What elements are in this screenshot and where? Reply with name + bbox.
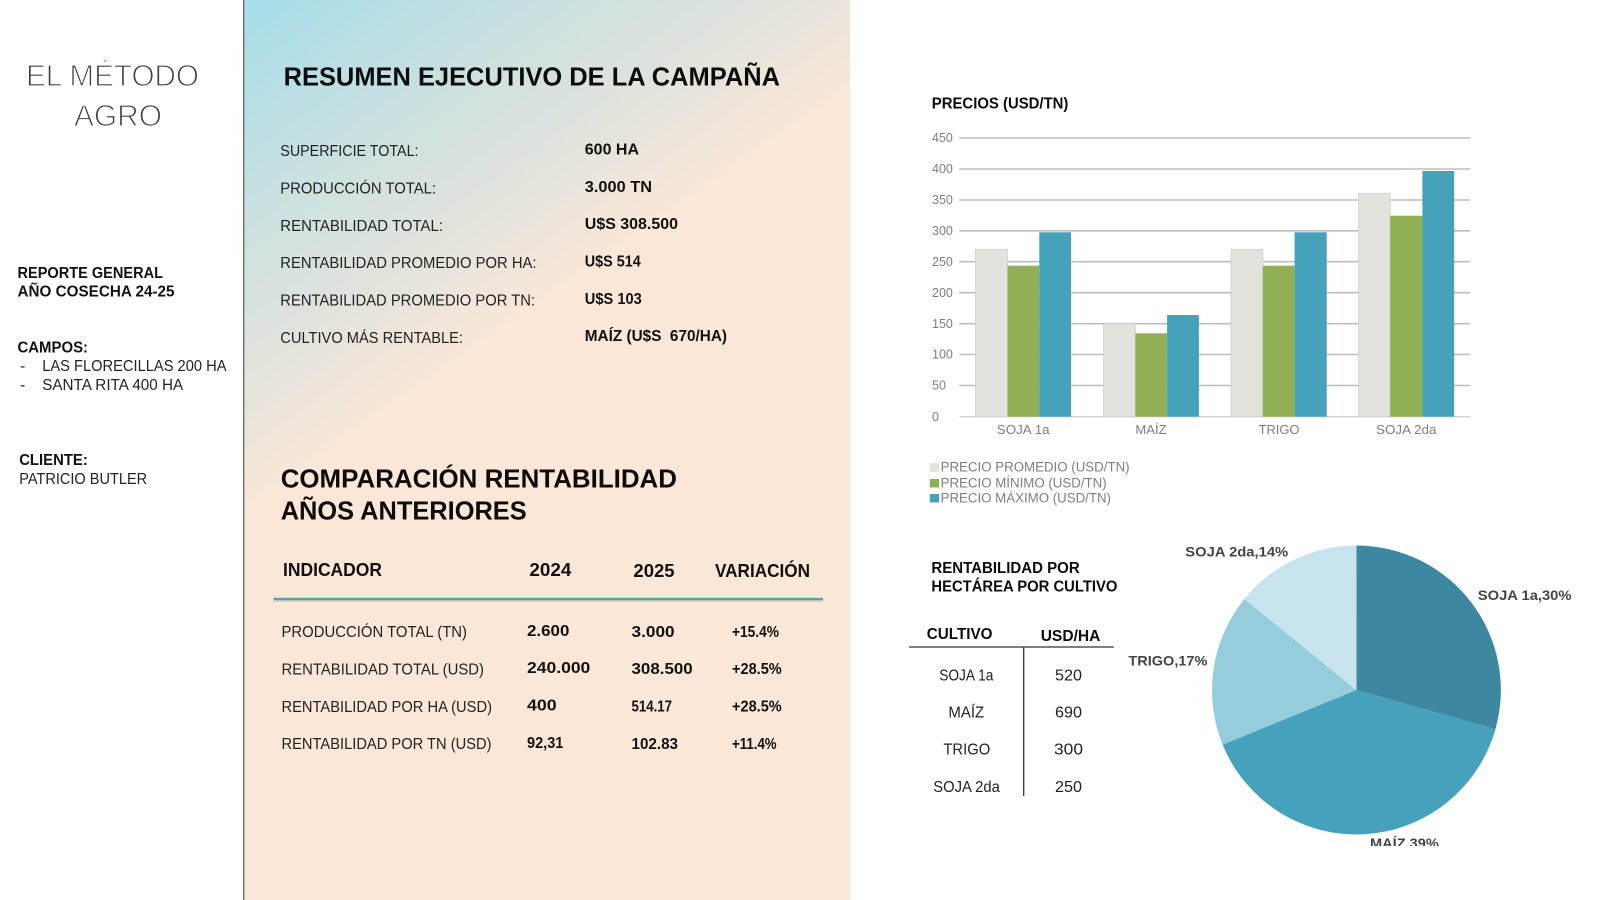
x axis labels: SOJA 2da	[1376, 423, 1437, 437]
table heading: RENTABILIDAD POR	[931, 560, 1080, 577]
panel: sidebar	[18, 58, 227, 488]
panel: comparison	[274, 464, 823, 753]
y axis labels: 50	[932, 379, 946, 393]
table heading	[931, 560, 1117, 596]
x axis labels: SOJA 1a	[997, 423, 1050, 437]
chart: pie	[1128, 544, 1572, 851]
summary values: U$S 103	[585, 291, 642, 308]
table rows: 3.000	[632, 624, 675, 641]
panel: executive summary	[280, 62, 780, 347]
text block: campos	[18, 340, 227, 394]
table header	[283, 560, 810, 581]
heading: comparación: AÑOS ANTERIORES	[281, 495, 527, 525]
summary labels: RENTABILIDAD PROMEDIO POR TN:	[280, 293, 535, 310]
table header	[927, 626, 1101, 645]
bars: soja 1a	[975, 232, 1071, 417]
legend	[930, 460, 1130, 506]
text block: cliente: CLIENTE:	[19, 452, 88, 469]
pie labels	[1128, 544, 1572, 851]
x axis labels: TRIGO	[1259, 423, 1300, 437]
table rows: 92,31	[527, 735, 563, 752]
summary labels: PRODUCCIÓN TOTAL:	[280, 179, 436, 198]
summary values: 600 HA	[585, 142, 639, 159]
table header: CULTIVO	[927, 626, 992, 643]
summary values	[585, 142, 727, 345]
summary values: U$S 308.500	[585, 216, 678, 233]
table rows: 300	[1054, 741, 1083, 758]
table rows: PRODUCCIÓN TOTAL (TN)	[282, 622, 467, 641]
table rows	[282, 622, 782, 753]
text block: report	[18, 265, 175, 301]
y axis labels: 250	[932, 255, 953, 269]
table header: 2025	[633, 561, 675, 581]
table rows: RENTABILIDAD TOTAL (USD)	[282, 661, 484, 678]
table: comparison	[274, 560, 823, 753]
summary labels: RENTABILIDAD PROMEDIO POR HA:	[280, 255, 536, 272]
text block: report: AÑO COSECHA 24-25	[18, 281, 175, 301]
table rows: RENTABILIDAD POR HA (USD)	[282, 699, 492, 716]
pie labels: MAÍZ,39%	[1370, 835, 1439, 851]
x axis labels: MAÍZ	[1135, 422, 1167, 437]
summary labels: CULTIVO MÁS RENTABLE:	[280, 328, 463, 347]
table rows: 250	[1055, 779, 1082, 796]
table header: VARIACIÓN	[715, 560, 810, 581]
text block: cliente: PATRICIO BUTLER	[19, 471, 147, 488]
table rows: 2.600	[527, 623, 569, 640]
text block: campos: SANTA RITA 400 HA	[42, 377, 184, 394]
table rows: 240.000	[527, 660, 590, 677]
y axis labels: 350	[932, 193, 953, 207]
summary values: U$S 514	[585, 253, 641, 270]
legend: PRECIO PROMEDIO (USD/TN)	[941, 459, 1130, 474]
title: El Método Agro: AGRO	[74, 98, 162, 133]
heading: comparación	[281, 464, 677, 526]
y axis labels: 0	[932, 410, 939, 424]
slice: soja 2da	[1244, 546, 1356, 690]
y axis labels	[932, 131, 953, 424]
text block: campos: CAMPOS:	[18, 340, 88, 357]
slice: trigo	[1212, 599, 1356, 745]
table rows: SOJA 1a	[939, 667, 993, 684]
chart: precios bar chart	[930, 96, 1470, 506]
text block: report: REPORTE GENERAL	[18, 265, 163, 282]
x axis labels	[997, 422, 1437, 437]
text block: campos: LAS FLORECILLAS 200 HA	[42, 358, 227, 375]
table header: 2024	[529, 560, 571, 580]
table rows: 308.500	[632, 661, 693, 678]
table rows: 400	[527, 697, 557, 714]
summary values: MAÍZ (U$S 670/HA)	[585, 326, 727, 345]
table header: USD/HA	[1041, 628, 1101, 645]
summary labels	[280, 143, 536, 347]
table rows: 102.83	[632, 736, 678, 753]
y axis labels: 400	[932, 162, 953, 176]
table rows: SOJA 2da	[933, 779, 1000, 796]
table rows: +15.4%	[732, 624, 779, 641]
table header: INDICADOR	[283, 560, 382, 580]
pie labels: SOJA 2da,14%	[1185, 544, 1289, 560]
y axis labels: 150	[932, 317, 953, 331]
y axis labels: 300	[932, 224, 953, 238]
table heading: HECTÁREA POR CULTIVO	[931, 578, 1117, 595]
panel: gradient background	[244, 0, 850, 900]
table rows	[933, 668, 1083, 796]
text block: cliente	[19, 452, 147, 488]
bars: trigo	[1231, 232, 1327, 417]
summary labels: SUPERFICIE TOTAL:	[280, 143, 418, 160]
slice: soja 1a	[1356, 546, 1501, 729]
pie labels: SOJA 1a,30%	[1478, 587, 1572, 603]
legend: PRECIO MÍNIMO (USD/TN)	[941, 475, 1107, 490]
legend: PRECIO MÁXIMO (USD/TN)	[941, 490, 1111, 505]
heading: comparación: COMPARACIÓN RENTABILIDAD	[281, 463, 677, 493]
table rows: +28.5%	[732, 661, 782, 678]
table rows: TRIGO	[943, 741, 990, 758]
bars: maíz	[1104, 315, 1199, 417]
table rows: 514.17	[632, 698, 672, 715]
table rows: MAÍZ	[948, 702, 984, 721]
text block: campos: -	[20, 358, 25, 375]
y axis labels: 100	[932, 348, 953, 362]
table rows: +28.5%	[732, 698, 782, 715]
chart title: PRECIOS (USD/TN)	[932, 96, 1068, 113]
title: El Método Agro	[26, 58, 199, 133]
table rows: 690	[1055, 704, 1082, 721]
heading: resumen ejecutivo: RESUMEN EJECUTIVO DE LA CAMPAÑA	[284, 62, 780, 92]
panel: rentabilidad por hectárea table	[909, 560, 1117, 796]
summary values: 3.000 TN	[585, 179, 652, 196]
table rows: 520	[1055, 667, 1082, 684]
summary labels: RENTABILIDAD TOTAL:	[280, 218, 443, 235]
title: El Método Agro: EL MÉTODO	[26, 58, 199, 93]
slice: maíz	[1223, 690, 1495, 834]
y axis labels: 200	[932, 286, 953, 300]
bars: soja 2da	[1358, 171, 1454, 417]
text block: campos: -	[20, 377, 25, 394]
pie labels: TRIGO,17%	[1128, 652, 1208, 668]
table rows: RENTABILIDAD POR TN (USD)	[282, 736, 492, 753]
table rows: +11.4%	[732, 736, 777, 753]
y axis labels: 450	[932, 131, 953, 145]
